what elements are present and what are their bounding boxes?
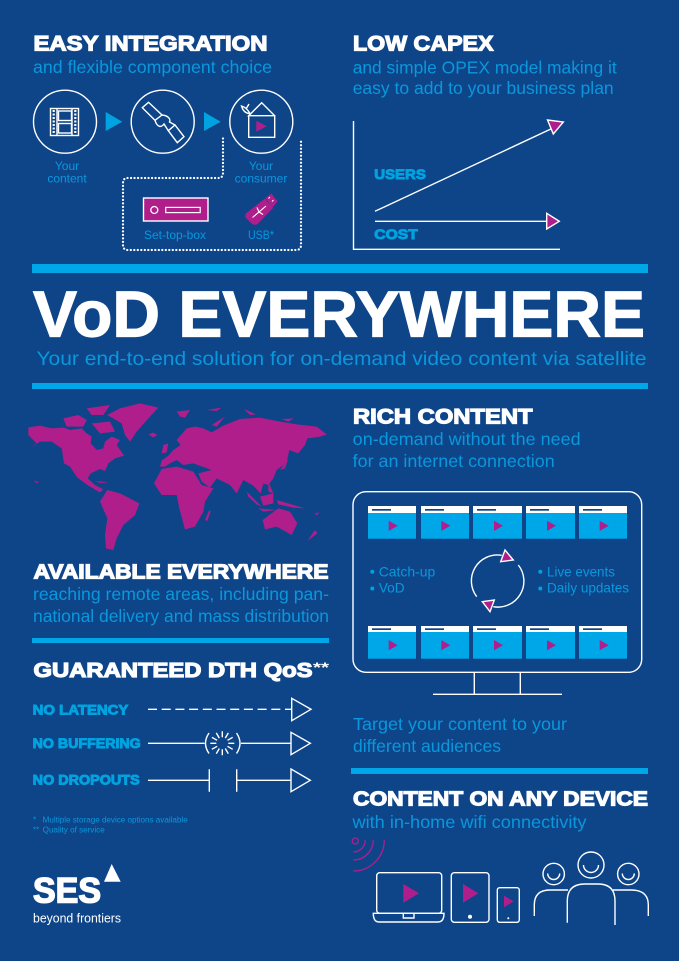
label: set-top-box: Set-top-box bbox=[144, 228, 206, 242]
chart: users versus cost: USERS bbox=[374, 166, 426, 182]
footnotes: * bbox=[33, 815, 36, 824]
text: target your content: different audiences bbox=[353, 736, 501, 756]
panel: rich content bbox=[351, 404, 648, 774]
arrow: satellite to consumer bbox=[204, 112, 221, 131]
subheading: on-demand: for an internet connection bbox=[353, 451, 555, 471]
label: your content: Your bbox=[55, 159, 79, 173]
panel: guaranteed dth qos bbox=[33, 659, 330, 835]
video thumbnails: top row bbox=[368, 506, 627, 539]
label: your content bbox=[47, 159, 87, 186]
subheading: simple opex model: and simple OPEX model making it bbox=[353, 57, 617, 77]
icon: monitor bbox=[353, 492, 642, 694]
label: your content: content bbox=[47, 172, 87, 186]
logo: ses: SES bbox=[33, 872, 101, 911]
panel: available everywhere bbox=[32, 560, 329, 643]
panel: content on any device bbox=[351, 788, 648, 925]
text: target your content bbox=[353, 714, 567, 756]
icon: phone bbox=[497, 888, 519, 922]
label: your consumer: Your bbox=[249, 159, 273, 173]
label: usb: USB* bbox=[248, 228, 274, 242]
panel: easy integration bbox=[33, 32, 301, 250]
footnotes: Multiple storage device options available bbox=[43, 815, 188, 824]
list: live events and daily updates bbox=[538, 563, 629, 596]
heading: guaranteed dth qos: ** bbox=[313, 659, 330, 675]
logo: ses: beyond frontiers bbox=[33, 911, 121, 926]
row: no latency: NO LATENCY bbox=[33, 703, 128, 718]
row: no buffering: NO BUFFERING bbox=[33, 736, 141, 751]
icon: three people bbox=[534, 852, 648, 925]
heading: available everywhere: AVAILABLE EVERYWHERE bbox=[34, 560, 328, 584]
heading: rich content: RICH CONTENT bbox=[353, 404, 532, 428]
icon: wifi signal bbox=[352, 838, 384, 871]
heading: guaranteed dth qos: GUARANTEED DTH QoS bbox=[34, 659, 312, 682]
world map bbox=[28, 403, 327, 550]
chart: users versus cost bbox=[354, 120, 563, 249]
icon: usb stick bbox=[245, 194, 278, 225]
video thumbnails: bottom row bbox=[368, 626, 627, 659]
panel: main title band bbox=[32, 264, 648, 389]
text: target your content: Target your content to your bbox=[353, 714, 567, 734]
subheading: on-demand bbox=[353, 429, 581, 471]
subheading: simple opex model: easy to add to your business plan bbox=[353, 78, 614, 98]
row: no dropouts bbox=[33, 769, 310, 792]
label: your consumer bbox=[235, 159, 287, 186]
dotted connector bbox=[123, 138, 301, 250]
subheading: on-demand: on-demand without the need bbox=[353, 429, 581, 449]
row: no dropouts: NO DROPOUTS bbox=[33, 773, 140, 788]
list: catch-up and vod bbox=[370, 563, 435, 596]
footnotes: ** bbox=[33, 826, 39, 835]
footnotes bbox=[33, 815, 188, 835]
subheading: flexible component choice: and flexible component choice bbox=[33, 57, 272, 77]
row: no latency bbox=[33, 698, 311, 721]
icon: house with dish in circle bbox=[230, 90, 293, 153]
subheading: in-home wifi: with in-home wifi connectivity bbox=[351, 812, 587, 832]
icon: tablet bbox=[451, 873, 489, 922]
subtitle: Your end-to-end solution for on-demand video content via satellite bbox=[36, 348, 646, 370]
panel: low capex bbox=[353, 32, 617, 249]
chart: users versus cost: COST bbox=[374, 226, 418, 242]
heading: content on any device: CONTENT ON ANY DEVICE bbox=[353, 788, 648, 810]
body text: remote areas: reaching remote areas, including pan- bbox=[33, 584, 329, 604]
body text: remote areas bbox=[33, 584, 329, 626]
list: catch-up and vod: Catch-up bbox=[379, 563, 435, 579]
list: live events and daily updates: Live events bbox=[547, 563, 615, 579]
heading: low capex: LOW CAPEX bbox=[353, 32, 494, 56]
subheading: simple opex model bbox=[353, 57, 617, 98]
list: catch-up and vod: VoD bbox=[379, 580, 405, 596]
icon: film in circle bbox=[34, 90, 96, 153]
icon: satellite in circle bbox=[131, 90, 194, 153]
icon: refresh arrows bbox=[471, 550, 524, 612]
heading: easy integration: EASY INTEGRATION bbox=[34, 32, 268, 56]
icon: set-top-box bbox=[144, 198, 208, 221]
logo: ses bbox=[33, 864, 121, 926]
icon: laptop bbox=[373, 873, 444, 922]
label: your consumer: consumer bbox=[235, 172, 287, 186]
row: no buffering bbox=[33, 731, 310, 755]
title: VoD EVERYWHERE bbox=[33, 278, 645, 350]
body text: remote areas: national delivery and mass distribution bbox=[33, 606, 329, 626]
footnotes: Quality of service bbox=[43, 826, 105, 835]
arrow: content to satellite bbox=[106, 112, 122, 131]
list: live events and daily updates: Daily updates bbox=[547, 580, 629, 596]
